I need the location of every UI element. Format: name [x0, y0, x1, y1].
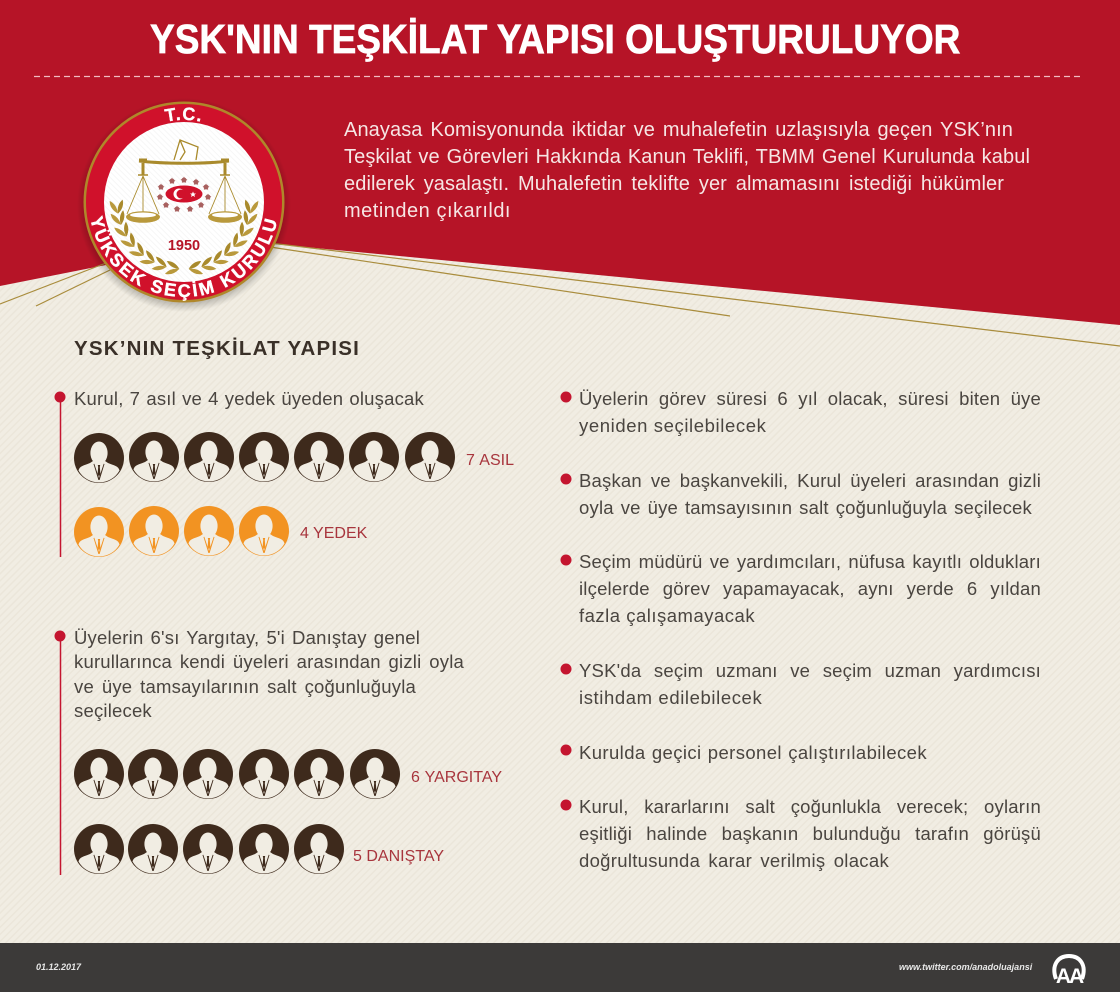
left item 2: ve üye tamsayılarının salt çoğunluğuyla — [74, 676, 416, 697]
left item 2: kurullarınca kendi üyeleri arasından gizli oyla — [74, 651, 464, 672]
timeline left — [54, 392, 66, 875]
right item 6 — [579, 796, 1041, 871]
intro text: edilerek yasalaştı. Muhalefetin teklifte yer almamasını istediği hükümler — [344, 173, 1004, 195]
left item 2: Üyelerin 6'sı Yargıtay, 5'i Danıştay genel — [74, 627, 420, 648]
right item 4 — [579, 660, 1041, 708]
dashed divider — [34, 76, 1082, 78]
icons row: 5 danistay — [74, 824, 344, 874]
left item 2: seçilecek — [74, 700, 152, 721]
label: 6 yargitay: 6 YARGITAY — [411, 769, 502, 786]
seal bottom text: YÜKSEK SEÇİM KURULU — [91, 215, 276, 301]
title: YSK'NIN TEŞKİLAT YAPISI OLUŞTURULUYOR — [150, 16, 960, 62]
section heading: YSK’NIN TEŞKİLAT YAPISI — [74, 337, 360, 360]
right item 6: doğrultusunda karar verilmiş olacak — [579, 850, 889, 871]
scales — [126, 160, 242, 223]
right item 3: ilçelerde görev yapamayacak, aynı yerde 6 yıldan — [579, 578, 1041, 599]
right item 6: Kurul, kararlarını salt çoğunlukla verecek; oyların — [579, 796, 1041, 817]
right item 3: fazla çalışamayacak — [579, 605, 755, 626]
label: 5 danistay: 5 DANIŞTAY — [353, 848, 444, 865]
gold accent lines — [0, 243, 1120, 346]
icons row: 7 asil — [74, 432, 455, 483]
right item 1: yeniden seçilebilecek — [579, 415, 766, 436]
right item 6: eşitliği halinde başkanın bulunduğu tarafın görüşü — [579, 823, 1041, 844]
right item 4: YSK'da seçim uzmanı ve seçim uzman yardımcısı — [579, 660, 1041, 681]
right item 4: istihdam edilebilecek — [579, 687, 762, 708]
intro text: Anayasa Komisyonunda iktidar ve muhalefetin uzlaşısıyla geçen YSK’nın — [344, 119, 1013, 141]
right item 1: Üyelerin görev süresi 6 yıl olacak, süresi biten üye — [579, 388, 1041, 409]
icons row: 6 yargitay — [74, 749, 400, 799]
left item 2 — [74, 627, 464, 721]
crescent and star oval — [166, 186, 202, 202]
bullets right — [560, 392, 572, 810]
left item 1: Kurul, 7 asıl ve 4 yedek üyeden oluşacak — [74, 388, 424, 409]
intro text — [344, 119, 1030, 222]
right item 5: Kurulda geçici personel çalıştırılabilecek — [579, 742, 927, 763]
footer date: 01.12.2017 — [36, 962, 81, 972]
right item 2: oyla ve üye tamsayısının salt çoğunluğuyla seçilecek — [579, 497, 1032, 518]
label: 4 yedek: 4 YEDEK — [300, 525, 367, 542]
seal top text: T.C. — [164, 107, 200, 122]
red header band — [0, 0, 1120, 325]
footer link: www.twitter.com/anadoluajansi — [899, 962, 1032, 972]
laurel wreath — [109, 199, 259, 275]
right item 1 — [579, 388, 1041, 436]
right item 3 — [579, 551, 1041, 626]
right item 3: Seçim müdürü ve yardımcıları, nüfusa kayıtlı oldukları — [579, 551, 1041, 572]
AA logo — [1054, 956, 1084, 988]
label: 7 asil: 7 ASIL — [466, 452, 514, 469]
footer bar — [0, 943, 1120, 992]
right item 2 — [579, 470, 1041, 518]
seal: Yüksek Seçim Kurulu emblem — [79, 100, 289, 310]
AA logo: AA — [1056, 965, 1084, 988]
right item 2: Başkan ve başkanvekili, Kurul üyeleri arasından gizli — [579, 470, 1041, 491]
ballot paper — [174, 140, 198, 160]
intro text: Teşkilat ve Görevleri Hakkında Kanun Teklifi, TBMM Genel Kurulunda kabul — [344, 146, 1030, 168]
icons row: 4 yedek — [74, 506, 289, 557]
year: 1950 — [168, 238, 200, 254]
intro text: metinden çıkarıldı — [344, 200, 511, 222]
stars — [156, 176, 212, 212]
